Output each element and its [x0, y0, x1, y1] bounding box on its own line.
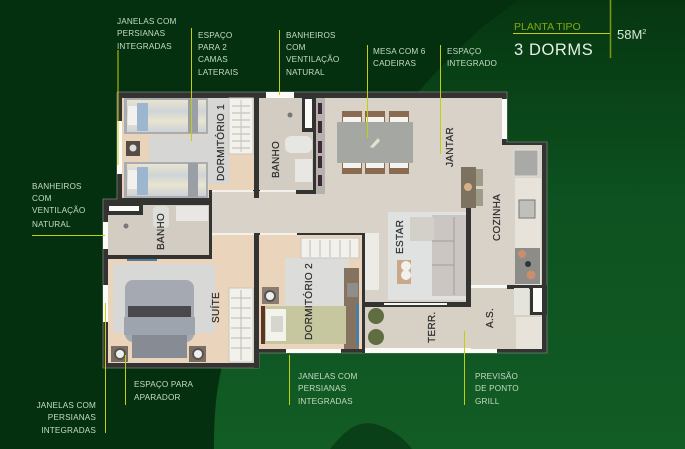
outer walls	[103, 92, 547, 368]
callout: janelas dormitório 1: INTEGRADAS	[117, 42, 172, 51]
suíte: SUÍTE	[209, 292, 222, 323]
callout: espaço integrado: ESPAÇO	[447, 47, 481, 56]
callout: banheiros esquerda: NATURAL	[32, 220, 71, 229]
kitchen	[492, 150, 541, 285]
callout: janelas suíte	[37, 303, 106, 435]
callout: banheiros: NATURAL	[286, 68, 325, 77]
terraço: TERR.	[427, 312, 438, 343]
open living floor	[212, 98, 542, 302]
kitchen: COZINHA	[492, 194, 503, 241]
wardrobe	[229, 98, 253, 154]
callout: mesa: MESA COM 6	[373, 47, 426, 56]
callout: janelas dormitório 1: JANELAS COM	[117, 17, 176, 26]
callout: banheiros	[280, 30, 339, 95]
room: dormitório 1	[122, 98, 254, 198]
terraço	[365, 302, 542, 353]
callout: banheiros: BANHEIROS	[286, 31, 336, 40]
callout: banheiros esquerda: COM	[32, 194, 52, 203]
callout: aparador	[126, 355, 194, 405]
callout: janelas dormitório 2: PERSIANAS	[298, 384, 347, 393]
área de serviço	[471, 285, 547, 349]
window: dormitório 1	[117, 121, 122, 174]
callout: banheiros: VENTILAÇÃO	[286, 54, 339, 64]
dormitório 2	[259, 235, 362, 349]
suíte	[103, 235, 254, 363]
bed 1	[124, 98, 208, 134]
callout: ponto grill	[464, 331, 519, 406]
callout: ponto grill: PREVISÃO	[475, 371, 518, 381]
floor plan	[103, 92, 547, 368]
callout: mesa: CADEIRAS	[373, 59, 416, 68]
callout: janelas dormitório 1	[117, 17, 176, 165]
callout: camas laterais: ESPAÇO	[198, 31, 232, 40]
interior walls	[212, 98, 362, 368]
callout: camas laterais	[192, 28, 239, 141]
callout: espaço integrado: INTEGRADO	[447, 59, 497, 68]
área de serviço: A.S.	[485, 308, 496, 328]
title block	[513, 0, 646, 59]
callout: banheiros esquerda	[32, 182, 105, 236]
title block: 3 DORMS	[514, 41, 593, 59]
title block: 58M	[617, 27, 642, 42]
callout: janelas suíte: PERSIANAS	[48, 413, 96, 422]
window: jantar	[502, 99, 507, 139]
callout: janelas suíte: JANELAS COM	[37, 401, 96, 410]
counter with stools	[461, 167, 483, 208]
callout: banheiros esquerda: BANHEIROS	[32, 182, 82, 191]
callout: aparador: APARADOR	[134, 393, 181, 402]
callout: mesa	[368, 45, 426, 138]
banho suíte	[103, 191, 212, 259]
room: banho 1	[259, 92, 315, 194]
dining table	[337, 111, 413, 174]
callout: ponto grill: DE PONTO	[475, 384, 519, 393]
estar: ESTAR	[395, 220, 406, 254]
label: DORMITÓRIO 1	[214, 104, 227, 181]
callout: janelas dormitório 2: INTEGRADAS	[298, 397, 353, 406]
dormitório 2: DORMITÓRIO 2	[302, 263, 315, 340]
callout: janelas suíte: INTEGRADAS	[41, 426, 96, 435]
callout: camas laterais: LATERAIS	[198, 68, 239, 77]
bed 2	[124, 162, 208, 198]
callout: janelas dormitório 1: PERSIANAS	[117, 29, 166, 38]
room: banho 1: BANHO	[271, 141, 282, 178]
nightstand	[126, 141, 140, 156]
wall: estar	[466, 208, 471, 307]
wine shelf	[313, 98, 325, 194]
window: dormitório 2	[286, 349, 341, 353]
callout: camas laterais: PARA 2	[198, 43, 227, 52]
callout: janelas dormitório 2	[290, 355, 357, 406]
title block: 2	[642, 27, 646, 36]
label: jantar: JANTAR	[445, 127, 456, 167]
callout: banheiros esquerda: VENTILAÇÃO	[32, 205, 85, 215]
callout: camas laterais: CAMAS	[198, 55, 228, 64]
callout: aparador: ESPAÇO PARA	[134, 380, 194, 389]
banho suíte: BANHO	[156, 213, 167, 250]
callout: banheiros: COM	[286, 43, 306, 52]
callout: espaço integrado	[440, 45, 497, 154]
estar	[388, 212, 466, 300]
title block: PLANTA TIPO	[514, 21, 581, 33]
callout: janelas dormitório 2: JANELAS COM	[298, 372, 357, 381]
callout: ponto grill: GRILL	[475, 397, 500, 406]
bancada / marble	[362, 233, 379, 353]
